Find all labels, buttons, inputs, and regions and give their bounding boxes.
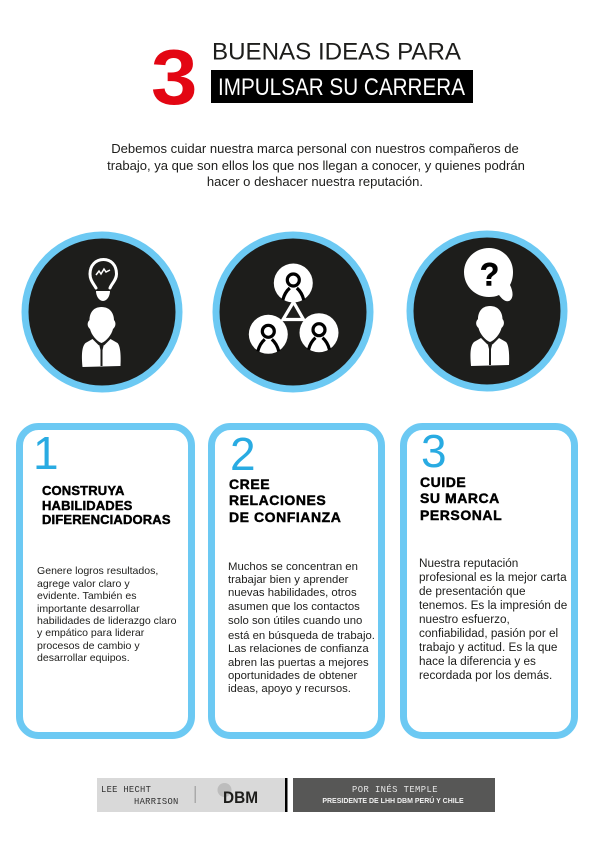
card 1 body: habilidades de liderazgo claro xyxy=(37,615,177,627)
card 2 body xyxy=(228,561,375,695)
card 1 heading: CONSTRUYA xyxy=(42,483,125,498)
card 3 body: trabajo y actitud. Es la que xyxy=(419,641,558,654)
icon circle: connected people xyxy=(216,235,370,389)
logo: Lee Hecht Harrison xyxy=(101,785,179,807)
card 2 body: Muchos se concentran en xyxy=(228,561,358,573)
card 2 body: nuevas habilidades, otros xyxy=(228,587,357,599)
logo: Lee Hecht Harrison: HARRISON xyxy=(134,797,179,807)
card 1 number: 1 xyxy=(33,427,59,479)
card 3 heading: PERSONAL xyxy=(420,507,502,523)
card 2 body: trabajar bien y aprender xyxy=(228,574,349,586)
card 3 body: recordada por los demás. xyxy=(419,669,552,682)
card 1 heading: HABILIDADES xyxy=(42,498,133,513)
card 3 heading: SU MARCA xyxy=(420,490,500,506)
intro text xyxy=(107,141,525,189)
title line one: BUENAS IDEAS PARA xyxy=(212,38,461,66)
title numeral 3: 3 xyxy=(151,34,197,121)
card 1 body xyxy=(37,565,177,664)
card 1 body: importante desarrollar xyxy=(37,603,140,615)
card 2 body: abren las puertas a mejores xyxy=(228,657,369,669)
card 3 body: tenemos. Es la impresión de xyxy=(419,599,568,612)
card 2 heading: DE CONFIANZA xyxy=(229,509,341,525)
icon: network triangle xyxy=(283,302,304,320)
card 2 body: está en búsqueda de trabajo. xyxy=(228,630,375,642)
icon: right person xyxy=(300,313,338,352)
card 3 body: Nuestra reputación xyxy=(419,557,518,570)
icon circle: light bulb and person xyxy=(25,235,179,389)
intro text: trabajo, ya que son ellos los que nos llegan a conocer, y quienes podrán xyxy=(107,158,525,173)
card 3 body: nuestro esfuerzo, xyxy=(419,613,510,626)
card 1 body: procesos de cambio y xyxy=(37,640,140,652)
card 2 heading: CREE xyxy=(229,476,270,492)
logo: DBM xyxy=(218,783,258,807)
card 1 heading: DIFERENCIADORAS xyxy=(42,512,171,527)
footer author panel xyxy=(293,778,495,812)
card 3 body: hace la diferencia y es xyxy=(419,655,536,668)
card 1 body: Genere logros resultados, xyxy=(37,565,158,577)
card 2 heading xyxy=(229,476,341,525)
card 2 number: 2 xyxy=(230,428,256,480)
logo: DBM: DBM xyxy=(223,788,258,807)
card 1 body: evidente. También es xyxy=(37,590,136,602)
card 3 heading: CUIDE xyxy=(420,474,466,490)
card 1 body: y empático para liderar xyxy=(37,627,145,639)
icon: person xyxy=(470,306,509,366)
card 2 body: solo son útiles cuando uno xyxy=(228,615,362,627)
footer author panel: POR INÉS TEMPLE xyxy=(352,784,438,795)
icon: speech bubble with question mark: ? xyxy=(480,256,499,292)
icon: person xyxy=(82,307,121,367)
card 3 body: profesional es la mejor carta xyxy=(419,571,567,584)
card 3 number: 3 xyxy=(421,425,447,477)
card 3 body xyxy=(419,557,568,682)
card 2 body: ideas, apoyo y recursos. xyxy=(228,683,351,695)
panel: card 2 xyxy=(212,426,382,736)
title line two on black band: IMPULSAR SU CARRERA xyxy=(218,74,465,101)
icon: speech bubble with question mark xyxy=(464,248,513,301)
icon: top person xyxy=(274,264,313,302)
footer logos panel xyxy=(97,778,285,812)
card 2 body: asumen que los contactos xyxy=(228,601,360,613)
intro text: hacer o deshacer nuestra reputación. xyxy=(207,174,423,189)
card 2 heading: RELACIONES xyxy=(229,492,326,508)
logo: Lee Hecht Harrison: LEE HECHT xyxy=(101,785,151,795)
icon circle: question bubble and person xyxy=(410,234,564,388)
footer author panel: PRESIDENTE DE LHH DBM PERÚ Y CHILE xyxy=(322,796,464,805)
card 2 body: oportunidades de obtener xyxy=(228,670,358,682)
icon: light bulb xyxy=(90,260,116,301)
card 3 body: de presentación que xyxy=(419,585,526,598)
card 1 body: agrege valor claro y xyxy=(37,578,130,590)
intro text: Debemos cuidar nuestra marca personal con nuestros compañeros de xyxy=(111,141,519,156)
panel: card 3 xyxy=(404,425,574,736)
card 2 body: Las relaciones de confianza xyxy=(228,643,369,655)
card 1 heading xyxy=(42,483,171,527)
icon: left person xyxy=(249,315,288,354)
card 3 body: confiabilidad, pasión por el xyxy=(419,627,558,640)
panel: card 1 xyxy=(20,426,192,736)
card 1 body: desarrollar equipos. xyxy=(37,652,130,664)
card 3 heading xyxy=(420,474,502,523)
title xyxy=(151,34,473,121)
